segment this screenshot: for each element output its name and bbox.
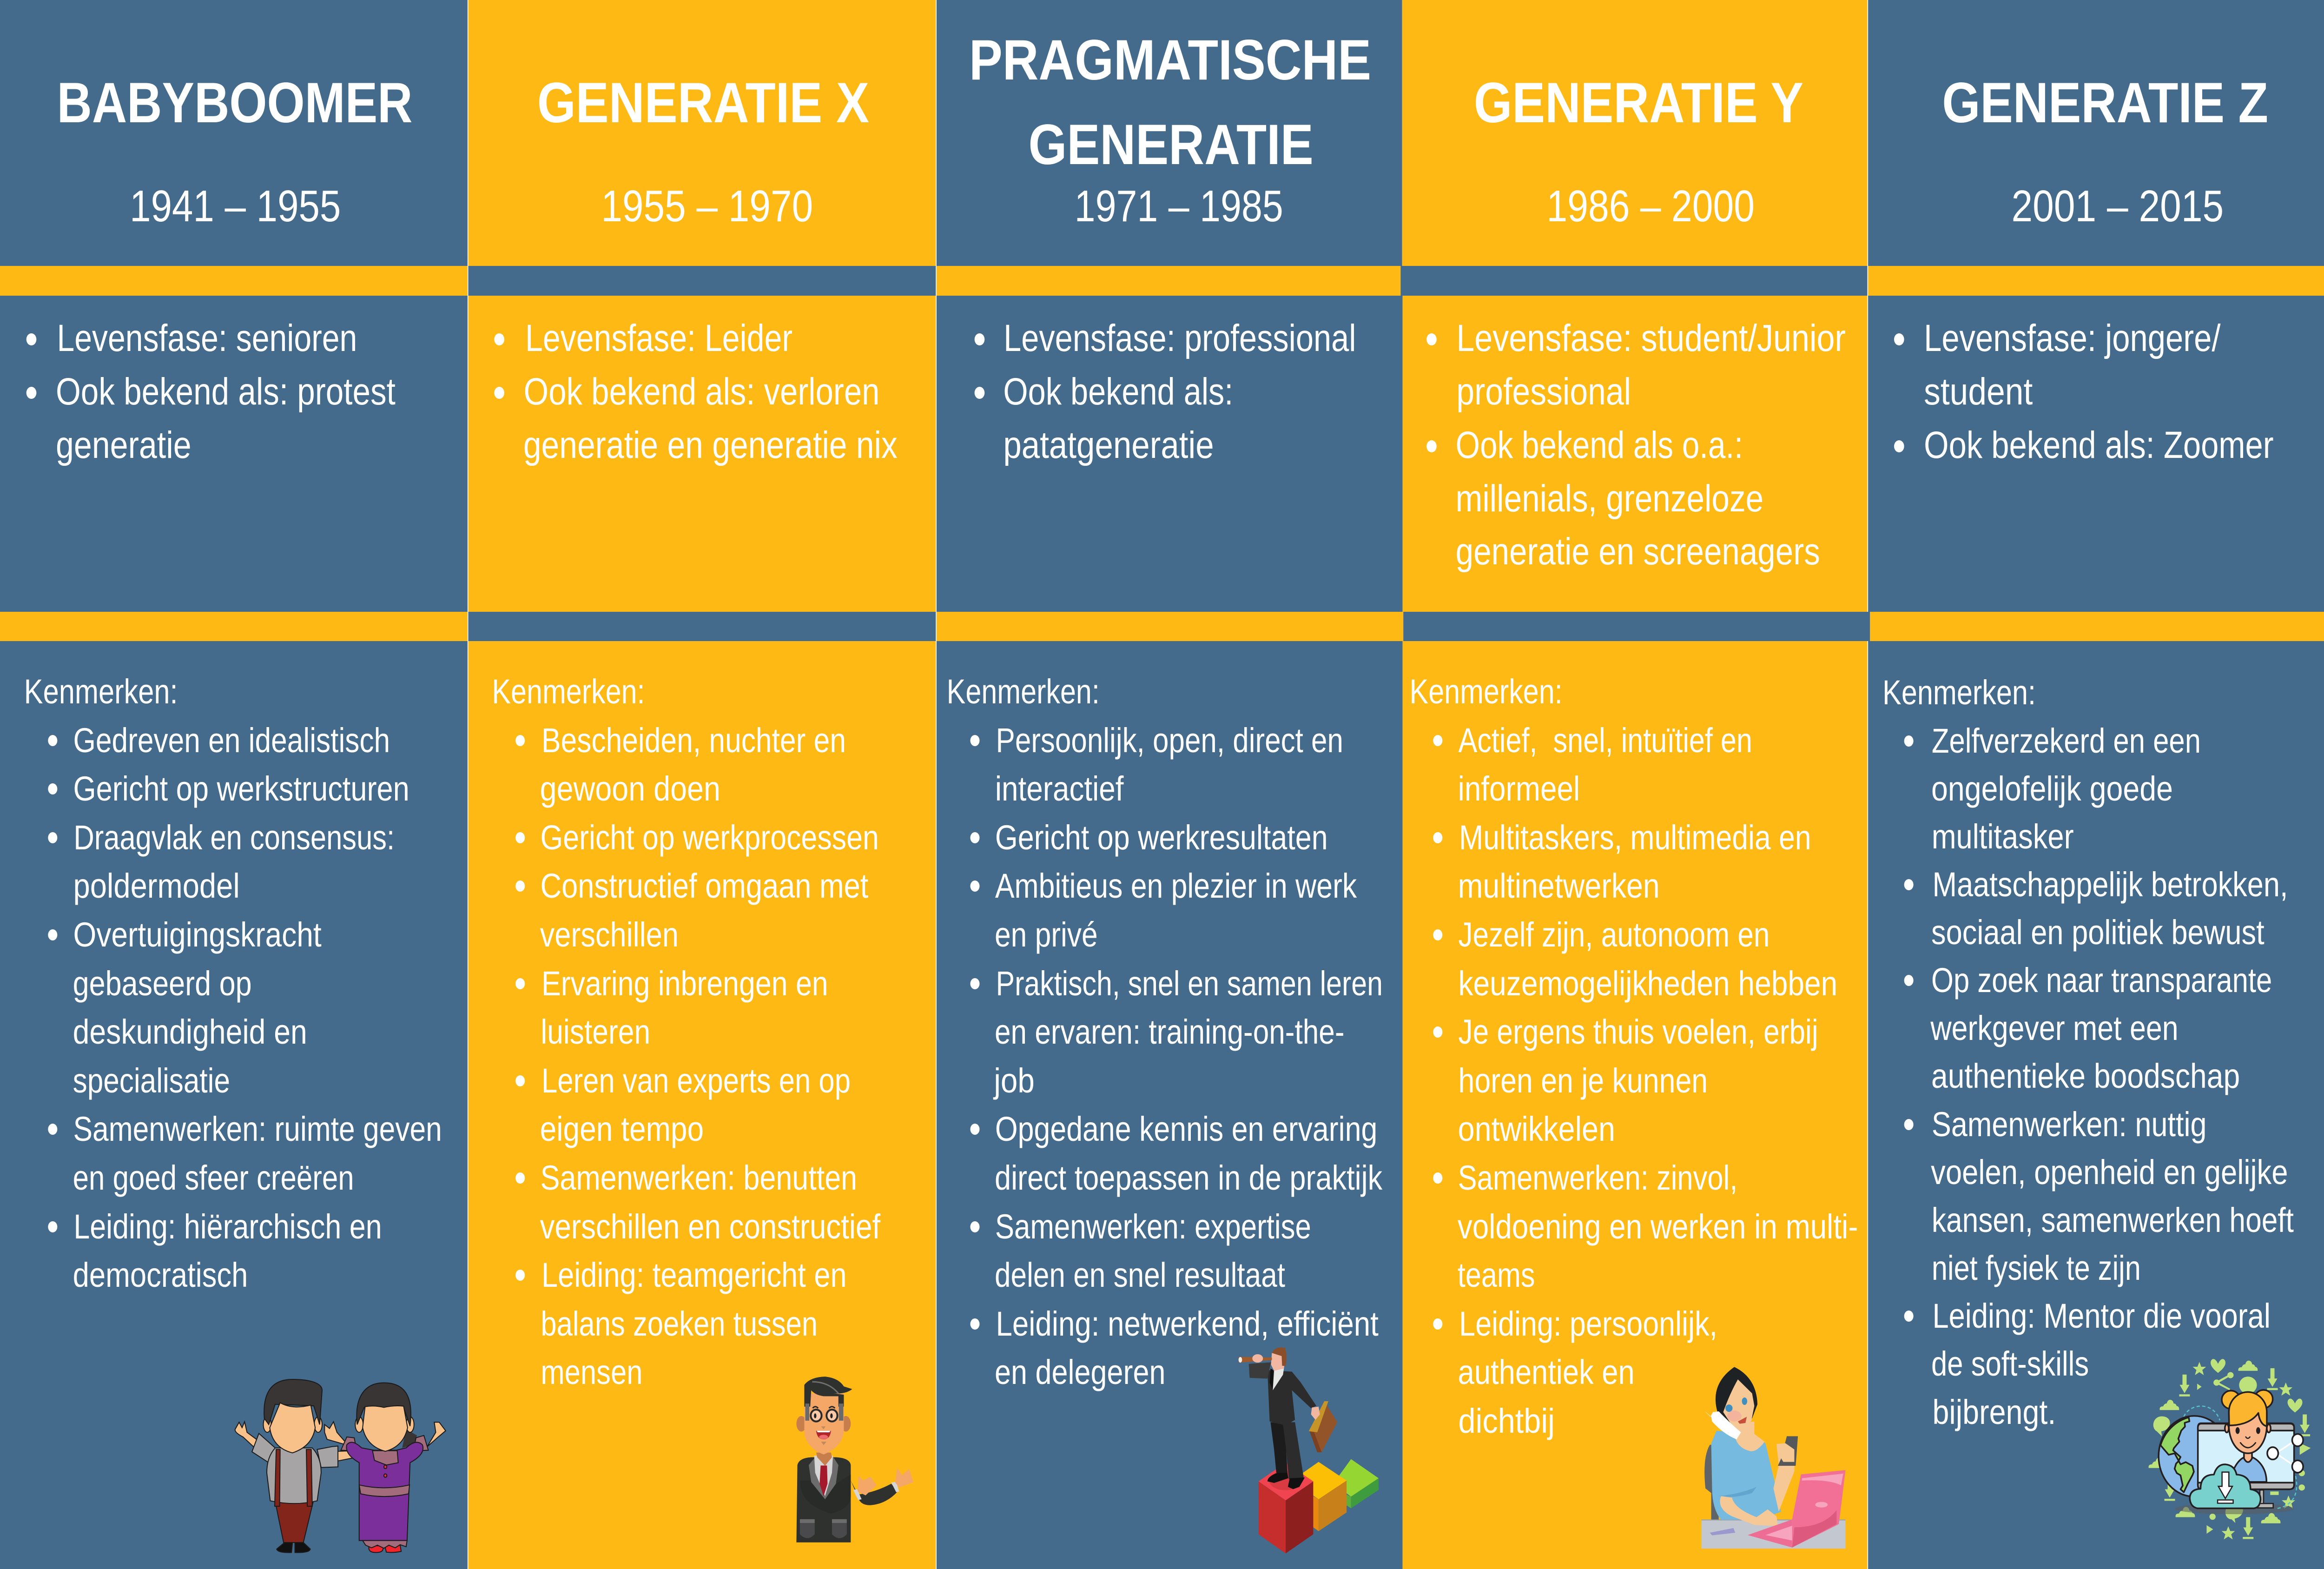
characteristics list: babyboomer: gebaseerd op [73, 965, 252, 1003]
characteristics list: generatie y [1409, 673, 1858, 1440]
characteristics list: generatie x: mensen [541, 1353, 643, 1391]
characteristics list: generatie z: werkgever met een [1930, 1009, 2179, 1047]
life phase list: pragmatische generatie: Ook bekend als: [1003, 370, 1233, 412]
characteristics list: generatie x: luisteren [541, 1013, 650, 1051]
characteristics list: generatie x: eigen tempo [540, 1110, 704, 1148]
characteristics list: generatie x: Constructief omgaan met [540, 867, 868, 905]
characteristics list: generatie x: Gericht op werkprocessen [540, 819, 879, 857]
characteristics list: babyboomer: Gericht op werkstructuren [73, 770, 409, 808]
characteristics list: generatie z: multitasker [1932, 818, 2074, 856]
characteristics list: generatie y: Multitaskers, multimedia en [1459, 819, 1811, 857]
characteristics list: generatie y: informeel [1458, 770, 1580, 808]
characteristics list: babyboomer: democratisch [73, 1256, 248, 1294]
illustration: man with telescope on blocks [1239, 1347, 1379, 1553]
characteristics list: pragmatische generatie: en privé [995, 916, 1098, 954]
life phase list: generatie z: Levensfase: jongere/ [1924, 317, 2221, 359]
characteristics list: generatie x: Ervaring inbrengen en [541, 965, 828, 1003]
heading: pragmatische generatie [969, 28, 1371, 176]
characteristics list: pragmatische generatie: Ambitieus en plezier in werk [995, 867, 1357, 905]
life phase list: generatie y: professional [1456, 370, 1631, 412]
characteristics list: pragmatische generatie: interactief [995, 770, 1124, 808]
years: generatie y: 1986 – 2000 [1547, 181, 1755, 231]
panel: pragmatische generatie [937, 0, 1403, 1569]
characteristics list: generatie y: dichtbij [1459, 1402, 1555, 1440]
characteristics list: pragmatische generatie: Leiding: netwerkend, efficiënt [996, 1305, 1379, 1343]
panel: generatie y [1400, 0, 1870, 1569]
characteristics list: generatie x: Bescheiden, nuchter en [541, 722, 846, 760]
illustration: businessman [796, 1377, 913, 1543]
characteristics list: babyboomer: Kenmerken: [24, 673, 178, 711]
life phase list: generatie y: Ook bekend als o.a.: [1456, 424, 1743, 466]
panel: babyboomer [0, 0, 468, 1569]
life phase list: babyboomer [26, 317, 396, 466]
characteristics list: generatie z: Samenwerken: nuttig [1932, 1106, 2207, 1144]
characteristics list: pragmatische generatie: en ervaren: training-on-the- [995, 1013, 1345, 1051]
illustration: elderly couple [235, 1379, 446, 1553]
characteristics list: generatie x: Samenwerken: benutten [540, 1159, 857, 1197]
life phase list: generatie y: millenials, grenzeloze [1456, 477, 1763, 519]
characteristics list: generatie z [1882, 674, 2294, 1431]
characteristics list: babyboomer: Gedreven en idealistisch [73, 722, 390, 760]
characteristics list: pragmatische generatie: Gericht op werkresultaten [995, 819, 1328, 857]
life phase list: generatie x: generatie en generatie nix [523, 424, 898, 466]
life phase list: pragmatische generatie: patatgeneratie [1003, 424, 1214, 466]
characteristics list: generatie x: Leren van experts en op [541, 1062, 851, 1100]
characteristics list: generatie x: Leiding: teamgericht en [541, 1256, 847, 1294]
characteristics list: pragmatische generatie [947, 673, 1383, 1391]
panel: generatie z [1868, 0, 2324, 1569]
years: pragmatische generatie: 1971 – 1985 [1075, 181, 1283, 231]
life phase list: generatie y: Levensfase: student/Junior [1456, 317, 1846, 359]
characteristics list: pragmatische generatie: Opgedane kennis en ervaring [995, 1110, 1377, 1148]
characteristics list: pragmatische generatie: Samenwerken: expertise [995, 1208, 1311, 1246]
heading: pragmatische generatie: PRAGMATISCHE [969, 28, 1371, 92]
life phase list: generatie x: Levensfase: Leider [525, 317, 792, 359]
characteristics list: generatie y: Jezelf zijn, autonoom en [1459, 916, 1769, 954]
characteristics list: generatie y: Leiding: persoonlijk, [1459, 1305, 1717, 1343]
characteristics list: pragmatische generatie: en delegeren [995, 1353, 1166, 1391]
characteristics list: generatie x: verschillen [540, 916, 679, 954]
characteristics list: generatie x: gewoon doen [540, 770, 720, 808]
characteristics list: generatie y: Je ergens thuis voelen, erbij [1459, 1013, 1818, 1051]
life phase list: babyboomer: Ook bekend als: protest [56, 370, 396, 412]
characteristics list: babyboomer [24, 673, 442, 1294]
characteristics list: babyboomer: Overtuigingskracht [73, 916, 322, 954]
heading: generatie z: GENERATIE Z [1942, 71, 2268, 134]
characteristics list: generatie z: Leiding: Mentor die vooral [1933, 1297, 2271, 1335]
characteristics list: generatie z: kansen, samenwerken hoeft [1932, 1201, 2294, 1239]
characteristics list: generatie y: teams [1458, 1256, 1535, 1294]
characteristics list: pragmatische generatie: job [993, 1062, 1035, 1100]
characteristics list: pragmatische generatie: Praktisch, snel en samen leren [996, 965, 1383, 1003]
life phase list: generatie z [1894, 317, 2274, 466]
characteristics list: generatie y: Kenmerken: [1409, 673, 1563, 711]
life phase list: generatie x: Ook bekend als: verloren [524, 370, 879, 412]
characteristics list: babyboomer: poldermodel [73, 867, 240, 905]
characteristics list: pragmatische generatie: delen en snel resultaat [995, 1256, 1285, 1294]
heading: babyboomer: BABYBOOMER [57, 71, 412, 134]
characteristics list: generatie y: authentiek en [1458, 1353, 1635, 1391]
characteristics list: generatie z: Kenmerken: [1882, 674, 2036, 712]
characteristics list: generatie z: sociaal en politiek bewust [1931, 914, 2265, 952]
characteristics list: babyboomer: en goed sfeer creëren [73, 1159, 354, 1197]
life phase list: generatie z: Ook bekend als: Zoomer [1924, 424, 2274, 466]
characteristics list: generatie y: voldoening en werken in multi- [1458, 1208, 1858, 1246]
life phase list: babyboomer: generatie [56, 424, 191, 466]
characteristics list: generatie y: ontwikkelen [1458, 1110, 1615, 1148]
heading: generatie x: GENERATIE X [537, 71, 869, 134]
panel: generatie x [469, 0, 936, 1569]
characteristics list: generatie z: authentieke boodschap [1931, 1057, 2240, 1095]
life phase list: generatie z: student [1924, 370, 2033, 412]
characteristics list: pragmatische generatie: direct toepassen in de praktijk [995, 1159, 1383, 1197]
characteristics list: generatie z: Op zoek naar transparante [1931, 961, 2272, 1000]
characteristics list: generatie x: balans zoeken tussen [541, 1305, 818, 1343]
life phase list: pragmatische generatie [975, 317, 1356, 466]
characteristics list: generatie y: multinetwerken [1458, 867, 1660, 905]
years: babyboomer: 1941 – 1955 [130, 181, 341, 231]
life phase list: generatie x [494, 317, 898, 466]
life phase list: generatie y: generatie en screenagers [1456, 530, 1820, 572]
life phase list: generatie y [1426, 317, 1846, 572]
characteristics list: generatie z: Zelfverzekerd en een [1932, 722, 2201, 760]
characteristics list: generatie y: Samenwerken: zinvol, [1458, 1159, 1737, 1197]
characteristics list: babyboomer: Samenwerken: ruimte geven [73, 1110, 442, 1148]
illustration: woman on phone with laptop [1702, 1367, 1845, 1549]
illustration: girl with globe, monitor and cloud [2149, 1359, 2311, 1539]
characteristics list: generatie x: verschillen en constructief [540, 1208, 881, 1246]
characteristics list: babyboomer: deskundigheid en [73, 1013, 307, 1051]
characteristics list: generatie z: Maatschappelijk betrokken, [1933, 866, 2288, 904]
years: generatie z: 2001 – 2015 [2012, 181, 2224, 231]
characteristics list: generatie z: voelen, openheid en gelijke [1931, 1153, 2288, 1192]
characteristics list: generatie z: de soft-skills [1931, 1345, 2089, 1383]
characteristics list: generatie x [492, 673, 881, 1391]
characteristics list: generatie y: keuzemogelijkheden hebben [1459, 965, 1837, 1003]
characteristics list: babyboomer: specialisatie [73, 1062, 230, 1100]
heading: pragmatische generatie: GENERATIE [1029, 113, 1314, 176]
characteristics list: generatie x: Kenmerken: [492, 673, 645, 711]
years: generatie x: 1955 – 1970 [601, 181, 813, 231]
characteristics list: generatie y: horen en je kunnen [1459, 1062, 1708, 1100]
characteristics list: pragmatische generatie: Kenmerken: [947, 673, 1100, 711]
characteristics list: generatie y: Actief, snel, intuïtief en [1459, 722, 1752, 760]
life phase list: babyboomer: Levensfase: senioren [57, 317, 357, 359]
characteristics list: generatie z: bijbrengt. [1933, 1393, 2056, 1431]
characteristics list: generatie z: niet fysiek te zijn [1932, 1249, 2141, 1287]
characteristics list: pragmatische generatie: Persoonlijk, open, direct en [996, 722, 1343, 760]
characteristics list: babyboomer: Leiding: hiërarchisch en [73, 1208, 382, 1246]
characteristics list: generatie z: ongelofelijk goede [1931, 770, 2173, 808]
life phase list: pragmatische generatie: Levensfase: professional [1004, 317, 1356, 359]
heading: generatie y: GENERATIE Y [1474, 71, 1803, 134]
characteristics list: babyboomer: Draagvlak en consensus: [73, 819, 395, 857]
